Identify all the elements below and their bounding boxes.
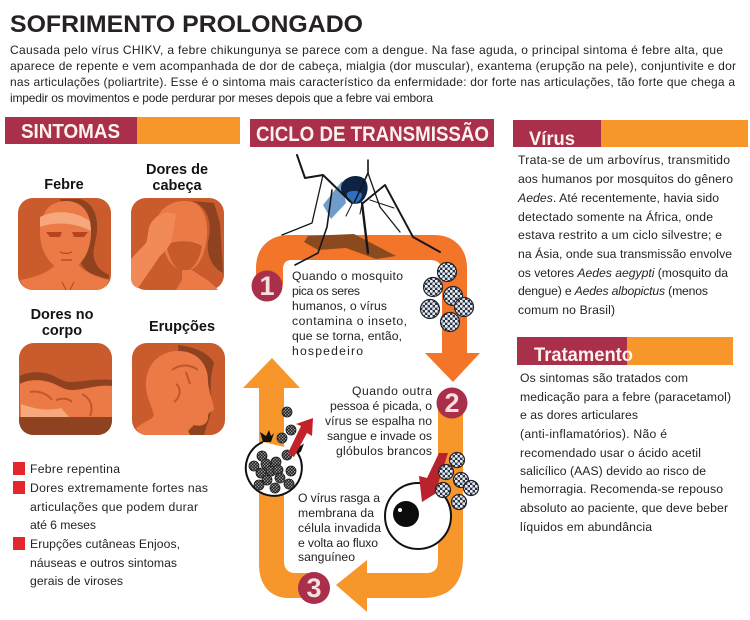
symptom list: Erupções cutâneas Enjoos, — [30, 537, 180, 551]
icon: febre — [18, 198, 111, 290]
symptom list: Febre repentina — [30, 462, 120, 476]
symptom list — [13, 462, 208, 588]
intro text: nas articulações (poliartrite). Esse é o sintoma mais característico da enfermidade: dor forte nas articulações, tão forte que chega a — [10, 75, 735, 89]
text: vírus: aos humanos por mosquitos do gênero — [518, 172, 733, 186]
symptom list: até 6 meses — [30, 518, 96, 532]
label: dores de cabeça — [146, 162, 208, 194]
symptom list: Dores extremamente fortes nas — [30, 481, 208, 495]
heading: sintomas: SINTOMAS — [21, 121, 120, 143]
arrow: step 3 to 1 — [243, 358, 313, 598]
heading: tratamento — [517, 337, 733, 366]
step 2 marker — [436, 388, 468, 418]
step 2 text: pessoa é picada, o — [330, 399, 432, 413]
arrow: step 1 to 2 — [256, 235, 480, 382]
icon: dores de cabeça — [131, 198, 224, 290]
text: vírus: dengue) e Aedes albopictus (menos — [518, 284, 708, 298]
illustration: infected cell — [385, 452, 478, 549]
step 3 marker — [298, 572, 330, 604]
text: tratamento: hemorragia. Recomenda-se repouso — [520, 482, 723, 496]
text: vírus: na Ásia, onde sua transmissão envolve — [518, 246, 732, 261]
text: tratamento: salicílico (AAS) devido ao risco de — [520, 464, 706, 478]
label: febre: Febre — [44, 177, 84, 193]
intro text: impedir os movimentos e pode perdurar por meses depois que a febre vai embora — [10, 91, 433, 105]
label: dores no corpo: Dores no — [31, 307, 94, 323]
text: vírus: detectado somente na África, onde — [518, 209, 713, 224]
text: vírus: os vetores Aedes aegypti (mosquito da — [518, 266, 728, 280]
panel: tratamento — [517, 337, 733, 534]
text: vírus: estava restrito a um ciclo silvestre; e — [518, 228, 722, 242]
text: vírus: comum no Brasil) — [518, 303, 615, 317]
label: erupções: Erupções — [149, 319, 215, 335]
text: tratamento: Os sintomas são tratados com — [520, 371, 688, 385]
step 1 text — [292, 269, 407, 358]
step 3 marker: 3 — [306, 573, 322, 603]
step 1 text: pica os seres — [292, 284, 360, 298]
step 3 text — [298, 491, 381, 564]
step 3 text: membrana da — [298, 506, 374, 520]
step 3 text: O vírus rasga a — [298, 491, 380, 505]
icon: dores no corpo — [19, 343, 112, 435]
step 3 text: célula invadida — [298, 521, 381, 535]
step 3 text: sanguíneo — [298, 550, 355, 564]
label: dores no corpo — [31, 307, 94, 339]
symptom list: articulações que podem durar — [30, 500, 198, 514]
symptom list: gerais de viroses — [30, 574, 123, 588]
step 2 marker: 2 — [444, 388, 460, 418]
label: dores de cabeça: Dores de — [146, 162, 208, 178]
step 1 text: hospedeiro — [292, 344, 363, 358]
heading: vírus — [513, 120, 748, 150]
text: tratamento: absoluto ao paciente, que deve beber — [520, 501, 728, 515]
text: vírus: Aedes. Até recentemente, havia sido — [517, 191, 719, 205]
label: dores no corpo: corpo — [42, 323, 82, 339]
text: tratamento — [520, 371, 731, 534]
text: tratamento: líquidos em abundância — [520, 520, 652, 534]
step 1 marker — [252, 270, 282, 302]
arrow: step 2 to 3 — [336, 405, 463, 612]
heading: tratamento: Tratamento — [534, 345, 633, 366]
icon: erupções — [132, 343, 225, 435]
panel: ciclo de transmissão — [243, 119, 494, 612]
intro text: Causada pelo vírus CHIKV, a febre chikungunya se parece com a dengue. Na fase aguda, o principal sintoma é febre alta, que — [10, 43, 723, 57]
step 2 text: glóbulos brancos — [336, 444, 432, 458]
title: SOFRIMENTO PROLONGADO — [10, 11, 363, 38]
heading: ciclo de transmissão: CICLO DE TRANSMISSÃO — [256, 123, 489, 146]
illustration: bursting cell — [246, 407, 313, 496]
symptom list: náuseas e outros sintomas — [30, 556, 177, 570]
virus particles: top right — [420, 262, 474, 332]
step 2 text: sangue e invade os — [327, 429, 432, 443]
panel: vírus — [513, 120, 748, 317]
step 1 marker: 1 — [259, 271, 275, 301]
text: tratamento: medicação para a febre (paracetamol) — [520, 390, 731, 404]
heading: vírus: Vírus — [529, 129, 575, 150]
step 3 text: e volta ao fluxo — [298, 536, 378, 550]
label: dores de cabeça: cabeça — [152, 178, 203, 194]
step 1 text: Quando o mosquito — [292, 269, 403, 283]
step 2 text — [325, 384, 432, 458]
intro text: aparece de repente e vem acompanhada de dor de cabeça, mialgia (dor muscular), exantema (erupção na pele), conjuntivite e dor — [10, 59, 736, 73]
step 2 text: Quando outra — [352, 384, 432, 398]
heading: sintomas — [5, 117, 240, 144]
text: vírus — [517, 153, 733, 317]
step 1 text: contamina o inseto, — [292, 314, 407, 328]
text: vírus: Trata-se de um arbovírus, transmitido — [518, 153, 730, 167]
text: tratamento: (anti-inflamatórios). Não é — [520, 427, 667, 441]
text: tratamento: e as dores articulares — [520, 408, 638, 422]
step 1 text: humanos, o vírus — [292, 299, 387, 313]
panel: sintomas — [5, 117, 240, 588]
illustration: mosquito — [282, 155, 440, 265]
text: tratamento: recomendado usar o ácido acetil — [520, 446, 701, 460]
intro text — [10, 43, 736, 105]
step 2 text: vírus se espalha no — [325, 414, 432, 428]
step 1 text: que se torna, então, — [292, 329, 402, 343]
